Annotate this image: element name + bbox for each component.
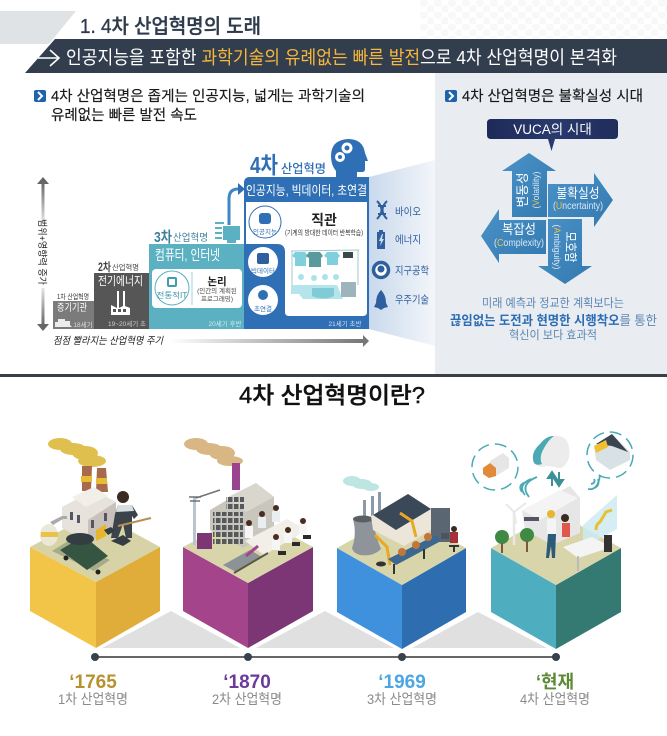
icon: computer: [215, 222, 240, 243]
fan gradient behind applications: [369, 160, 435, 346]
icon: wifi right: [588, 475, 600, 489]
block: 4th revolution: [244, 152, 369, 329]
block: 4th revolution: (기계의 방대한 데이터 반복학습): [285, 228, 363, 237]
banner: headline: 인공지능을 포함한 과학기술의 유례없는 빠른 발전으로 4차 산업혁명이 본격화: [66, 47, 617, 68]
illustration: smoke: [48, 438, 106, 467]
illustration: smoke: [184, 438, 243, 466]
arrow: complexity: (Complexity): [494, 238, 544, 249]
icon: head with gears: [331, 139, 368, 177]
block: 1st revolution: [53, 292, 94, 329]
background triangles: [102, 611, 547, 648]
block: 2nd revolution: 전기에너지: [98, 274, 143, 288]
block: 2nd revolution: 산업혁명: [112, 262, 139, 272]
label: present: 4차 산업혁명: [520, 691, 590, 707]
cube: fourth revolution: [472, 432, 633, 649]
arrow: complexity: 복잡성: [502, 222, 536, 237]
block: 3rd revolution: 논리: [207, 275, 227, 288]
illustration: truck node: [472, 444, 518, 490]
block: 4th revolution: 빅데이터: [251, 266, 275, 275]
left subheading: 유례없는 빠른 발전 속도: [51, 107, 197, 124]
block: 2nd revolution: 19~20세기 초: [108, 319, 146, 328]
label: 1870: [212, 672, 282, 707]
title: what is industry 4.0: 4차 산업혁명이란?: [239, 382, 425, 408]
vertical axis: scope and impact: [36, 177, 49, 331]
arrow: faster cycles: 점점 빨라지는 산업혁명 주기: [53, 335, 164, 347]
icon: data arrows: [548, 472, 563, 486]
block: 2nd revolution: [94, 261, 149, 329]
header dot pattern: [420, 0, 667, 38]
block: 3rd revolution: [149, 229, 245, 329]
text block: VUCA conclusion: 혁신이 보다 효과적: [509, 328, 597, 342]
applications list: 지구공학: [395, 265, 429, 277]
label: 1765: 1차 산업혁명: [58, 691, 128, 707]
text block: VUCA conclusion: 끊임없는 도전과 현명한 시행착오를 통한: [450, 313, 657, 328]
block: 3rd revolution: 20세기 후반: [209, 319, 241, 328]
block: 3rd revolution: (인간의 계획된: [197, 286, 237, 295]
block: 4th revolution: 21세기 초반: [329, 319, 361, 328]
icon: wifi left: [520, 477, 537, 497]
block: 3rd revolution: 전통적IT: [156, 290, 188, 300]
illustration: cloud: [533, 436, 570, 468]
illustration: worker: [104, 491, 151, 546]
label: 1870: 2차 산업혁명: [212, 691, 282, 707]
heading: section title: 1. 4차 산업혁명의 도래: [80, 15, 261, 38]
callout: VUCA era: VUCA의 시대: [513, 122, 592, 137]
text block: VUCA conclusion: 미래 예측과 정교한 계획보다는: [482, 296, 624, 310]
block: 4th revolution: 4차: [250, 152, 278, 178]
arrow: faster cycles: [53, 335, 369, 347]
block: 3rd revolution: 산업혁명: [173, 231, 208, 244]
cube: first revolution: [30, 438, 160, 648]
illustration: operator: [441, 526, 459, 552]
block: 1st revolution: 18세기: [73, 320, 93, 329]
block: 4th revolution: 직관: [311, 212, 337, 228]
label: 1765: ‘1765: [69, 672, 117, 693]
illustration: smoke: [343, 476, 379, 491]
block: 4th revolution: 초연결: [254, 304, 272, 313]
label: 1969: ‘1969: [378, 672, 426, 693]
block: 3rd revolution: 3차: [154, 229, 172, 246]
callout: VUCA era: [487, 119, 618, 151]
block: 2nd revolution: 2차: [98, 261, 111, 274]
illustration: steam factory: [40, 466, 116, 574]
heading: section title: [0, 11, 261, 44]
illustration: workers at assembly line: [223, 505, 311, 573]
illustration: electric factory: [189, 463, 274, 549]
label: 1969: 3차 산업혁명: [367, 691, 437, 707]
arrow: ambiguity: [538, 219, 592, 284]
arrow: ambiguity: 모호함: [563, 232, 578, 263]
label: present: [520, 672, 590, 707]
block: 3rd revolution: 프로그래밍): [201, 294, 233, 303]
arrow: uncertainty: 불확실성: [556, 186, 600, 201]
icon: battery: [377, 230, 385, 249]
block: 4th revolution: 산업혁명: [281, 161, 326, 176]
cube: third revolution: [337, 476, 466, 649]
block: 3rd revolution: 컴퓨터, 인터넷: [155, 247, 220, 263]
block: 4th revolution: 인공지능: [253, 227, 277, 236]
block: 4th revolution: 인공지능, 빅데이터, 초연결: [246, 183, 367, 198]
arrow: volatility: 변동성: [515, 172, 530, 208]
right subheading: 4차 산업혁명은 불확실성 시대: [462, 88, 643, 105]
label: present: ‘현재: [536, 672, 574, 692]
text block: VUCA conclusion: [450, 296, 657, 342]
applications list: 바이오: [395, 206, 421, 218]
label: 1969: [367, 672, 437, 707]
block: 1st revolution: 1차 산업혁명: [57, 292, 89, 301]
icon: dna: [377, 201, 387, 219]
arrow: volatility: [502, 153, 556, 217]
panel: right background: [435, 73, 667, 374]
applications list: 에너지: [395, 234, 421, 246]
banner: headline: [25, 39, 667, 73]
illustration: smart factory: [495, 486, 617, 571]
arrow: uncertainty: [548, 173, 613, 227]
illustration: laundry: [291, 250, 359, 299]
arrow: ambiguity: ( A mbiguity): [551, 224, 562, 270]
applications list: 우주기술: [395, 294, 429, 306]
block: 1st revolution: 증기기관: [57, 302, 87, 314]
left subheading: 4차 산업혁명은 좁게는 인공지능, 넓게는 과학기술의: [51, 88, 365, 105]
arrow: uncertainty: (Uncertainty): [553, 201, 603, 212]
arrow: complexity: [481, 209, 546, 263]
icon: rocket: [374, 290, 388, 310]
illustration: automated factory: [352, 492, 450, 574]
divider bar: [0, 374, 667, 377]
label: 1870: ‘1870: [223, 672, 271, 693]
arrow: third to fourth: [229, 183, 245, 225]
icon: globe gear: [374, 262, 388, 278]
illustration: warehouse node: [587, 432, 633, 478]
left subheading: [34, 88, 365, 124]
cube: second revolution: [183, 438, 313, 648]
diagram: VUCA arrows: [481, 153, 613, 284]
applications list: [374, 201, 429, 310]
label: 1765: [58, 672, 128, 707]
vertical axis: scope and impact: 범위+영향력 증가: [36, 219, 48, 285]
timeline: [91, 653, 560, 661]
arrow: volatility: (Volatility): [531, 172, 542, 208]
